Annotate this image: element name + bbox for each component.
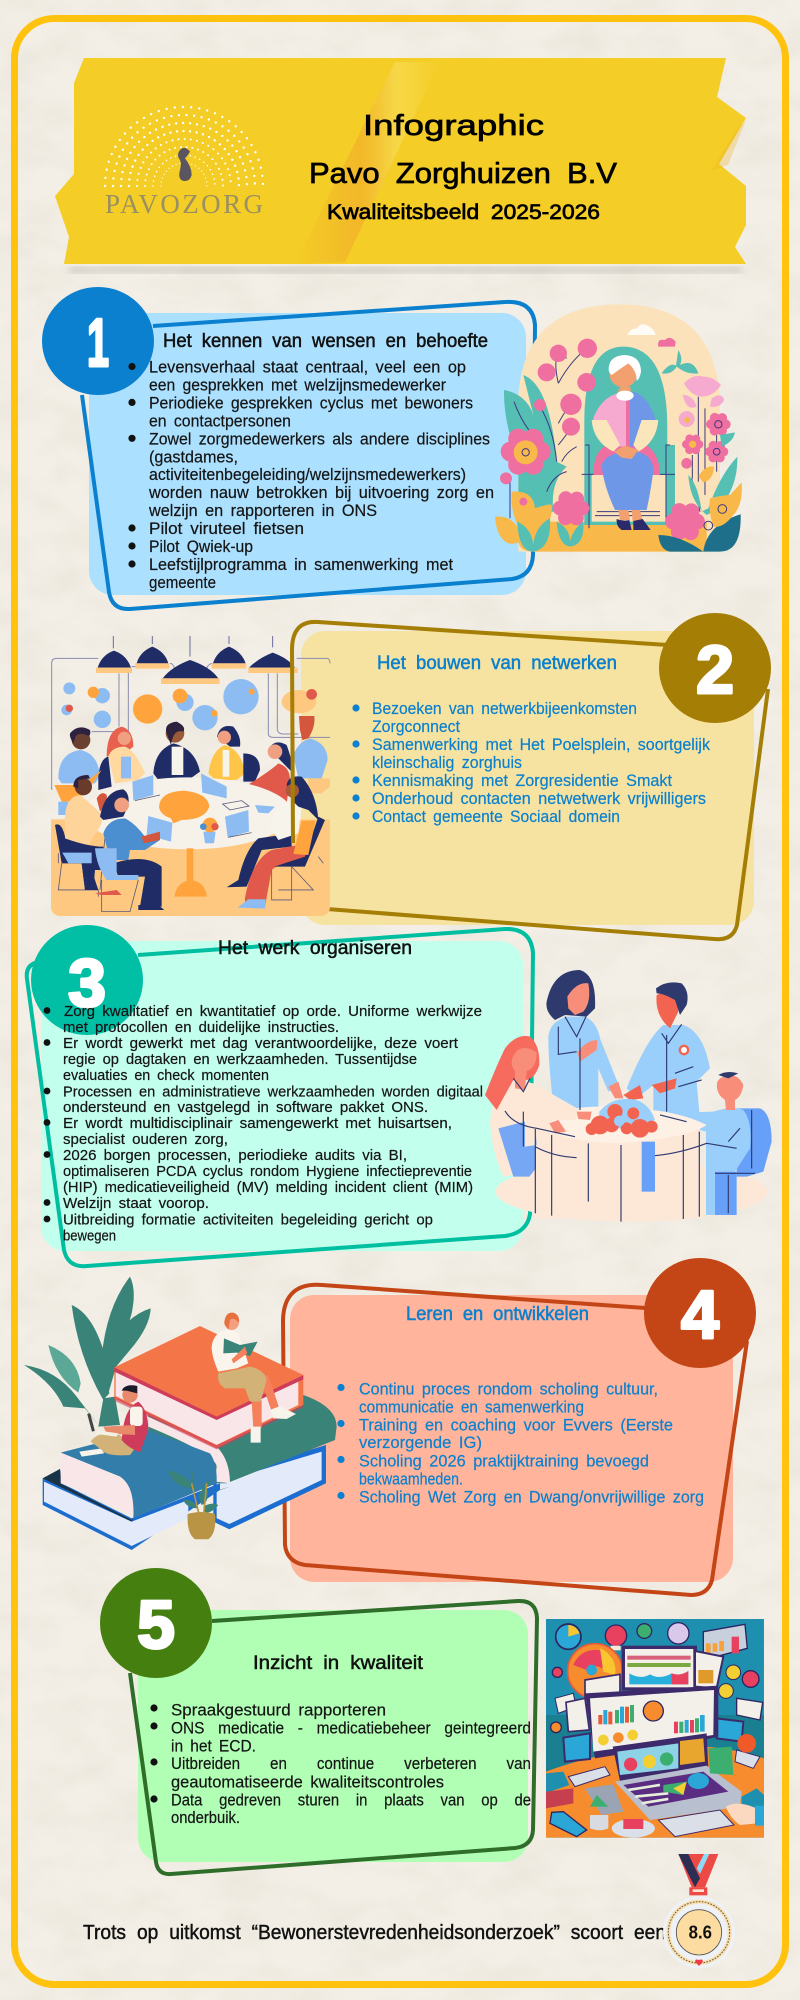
illustration: care team around table: [485, 970, 772, 1222]
illustration: dashboards: [546, 1619, 764, 1838]
badge 4: 4: [681, 1277, 719, 1353]
list 4: communicatie en samenwerking: [359, 1399, 584, 1417]
list 3: [44, 1003, 483, 1245]
base book left: [43, 1469, 220, 1550]
list 5: in het ECD.: [171, 1737, 256, 1755]
list 3: bewegen: [63, 1228, 116, 1245]
list 4: Continu proces rondom scholing cultuur,: [359, 1380, 658, 1398]
lamps: [98, 647, 295, 678]
panel 3: werk organiseren: [27, 929, 533, 1266]
footer sentence: Trots op uitkomst “Bewonerstevredenheidsonderzoek” scoort een: [83, 1921, 666, 1944]
medal 8.6: 8.6: [689, 1921, 712, 1942]
list 1: welzijn en rapporteren in ONS: [148, 502, 377, 520]
standing woman: [546, 970, 623, 1213]
base book right: [213, 1445, 326, 1529]
list 4: Training en coaching voor Evvers (Eerste: [359, 1416, 673, 1434]
green book: [148, 1395, 337, 1483]
list 1: [128, 358, 494, 592]
panel 1: wensen en behoefte: [42, 287, 535, 609]
badge 5: [100, 1568, 212, 1678]
badge 4: [644, 1258, 756, 1368]
list 1: Zowel zorgmedewerkers als andere disciplines: [149, 430, 490, 448]
illustration: team meeting: [51, 636, 330, 916]
list 5: onderbuik.: [171, 1809, 240, 1827]
title lines: Kwaliteitsbeeld 2025-2026: [327, 201, 600, 224]
reading man: [79, 1385, 148, 1457]
list 3: Er wordt gewerkt met dag verantwoordelijke, deze voert: [63, 1035, 459, 1052]
list 4: [337, 1380, 704, 1507]
panel 2: netwerken: [301, 631, 768, 939]
list 3: Uitbreiding formatie activiteiten begeleiding gericht op: [63, 1212, 433, 1228]
seated woman: [485, 1036, 592, 1177]
title lines: [309, 110, 618, 224]
list 2: Contact gemeente Sociaal domein: [372, 808, 620, 826]
table: [84, 777, 292, 849]
badge 3: 3: [68, 945, 106, 1021]
list 4: Scholing Wet Zorg en Dwang/onvrijwillige zorg: [359, 1489, 704, 1507]
list 3: Processen en administratieve werkzaamheden worden digitaal: [63, 1084, 483, 1100]
panel 4: leren en ontwikkelen: [283, 1285, 747, 1595]
logo: Pavozorg: [105, 107, 263, 219]
list 3: met protocollen en duidelijke instructies.: [63, 1019, 339, 1036]
badge 5: 5: [137, 1587, 175, 1663]
list 3: 2026 borgen processen, periodieke audits via BI,: [63, 1147, 407, 1164]
laptop: [613, 1733, 742, 1820]
list 2: Bezoeken van netwerkbijeenkomsten: [372, 700, 637, 718]
list 1: Pilot Qwiek-up: [149, 538, 253, 556]
list 1: Levensverhaal staat centraal, veel een op: [149, 358, 466, 376]
heading 3: Het werk organiseren: [218, 938, 412, 959]
list 3: Zorg kwalitatief en kwantitatief op orde. Uniforme werkwijze: [64, 1003, 482, 1020]
illustration: elderly woman in garden: [495, 304, 742, 552]
list 3: specialist ouderen zorg,: [63, 1131, 228, 1148]
logo: Pavozorg: PAVOZORG: [105, 189, 263, 219]
list 1: worden nauw betrokken bij uitvoering zorg en: [148, 484, 494, 502]
table: [535, 1128, 700, 1218]
heading 2: Het bouwen van netwerken: [377, 653, 617, 674]
woman figure: [592, 355, 660, 530]
list 3: optimaliseren PCDA cyclus rondom Hygiene infectiepreventie: [63, 1163, 472, 1180]
list 2: Samenwerking met Het Poelsplein, soortgelijk: [372, 736, 711, 754]
seated man: [660, 1072, 772, 1215]
badge 3: [31, 925, 143, 1035]
list 1: een gesprekken met welzijnsmedewerker: [149, 376, 446, 394]
list 1: gemeente: [149, 574, 216, 592]
main monitor: [585, 1686, 718, 1758]
list 2: [352, 700, 711, 826]
list 4: verzorgende IG): [359, 1434, 482, 1452]
list 1: Pilot viruteel fietsen: [149, 520, 304, 538]
list 5: [150, 1702, 531, 1827]
list 1: Periodieke gesprekken cyclus met bewoners: [149, 394, 473, 412]
badge 1: 1: [87, 305, 109, 381]
panel 5: inzicht in kwaliteit: [130, 1601, 537, 1874]
heading 5: Inzicht in kwaliteit: [253, 1653, 424, 1674]
back row: [54, 716, 330, 815]
list 3: Welzijn staat voorop.: [63, 1195, 209, 1212]
list 5: Spraakgestuurd rapporteren: [171, 1702, 386, 1720]
title lines: Infographic: [363, 110, 544, 142]
list 4: bekwaamheden.: [359, 1470, 463, 1488]
reading woman: [212, 1313, 296, 1443]
list 3: regie op dagtaken en werkzaamheden. Tussentijdse: [63, 1051, 417, 1068]
list 4: Scholing 2026 praktijktraining bevoegd: [359, 1453, 649, 1471]
badge 1: [42, 287, 154, 395]
top orange book: [114, 1367, 303, 1448]
list 5: geautomatiseerde kwaliteitscontroles: [171, 1773, 444, 1791]
list 2: kleinschalig zorghuis: [372, 754, 522, 772]
plants: [24, 1277, 151, 1425]
list 3: evaluaties en check momenten: [63, 1067, 269, 1084]
list 1: activiteitenbegeleiding/welzijnsmedewerkers): [149, 466, 466, 484]
list 1: Leefstijlprogramma in samenwerking met: [149, 556, 453, 574]
list 2: Onderhoud contacten netwetwerk vrijwilligers: [372, 790, 706, 808]
list 5: ONS medicatie - medicatiebeheer geintegreerd: [171, 1720, 531, 1738]
list 1: (gastdames,: [149, 448, 238, 466]
potted plant: [168, 1466, 230, 1539]
heading 1: Het kennen van wensen en behoefte: [163, 331, 488, 352]
standing man: [623, 982, 710, 1118]
list 3: (HIP) medicatieveiligheid (MV) melding incident client (MIM): [63, 1179, 473, 1196]
list 5: Uitbreiden en continue verbeteren van: [171, 1755, 531, 1773]
blue book: [61, 1430, 217, 1518]
list 1: en contactpersonen: [149, 412, 291, 430]
list 2: Zorgconnect: [372, 718, 460, 736]
list 5: Data gedreven sturen in plaats van op de: [171, 1792, 531, 1810]
foreground people: [55, 775, 325, 910]
top monitor: [622, 1646, 697, 1691]
heading 4: Leren en ontwikkelen: [406, 1304, 589, 1325]
panel 2 outline, left edge: [292, 622, 668, 843]
medal 8.6: [663, 1854, 735, 1968]
badge 2: [659, 613, 771, 723]
title lines: Pavo Zorghuizen B.V: [309, 158, 618, 190]
list 3: ondersteund en vastgelegd in software pakket ONS.: [63, 1099, 428, 1116]
badge 2: 2: [696, 632, 734, 708]
list 3: Er wordt multidisciplinair samengewerkt met huisartsen,: [63, 1115, 452, 1132]
banner: [55, 58, 746, 273]
central model: [586, 1099, 658, 1138]
illustration: books and readers: [24, 1277, 337, 1550]
list 2: Kennismaking met Zorgresidentie Smakt: [372, 772, 672, 790]
